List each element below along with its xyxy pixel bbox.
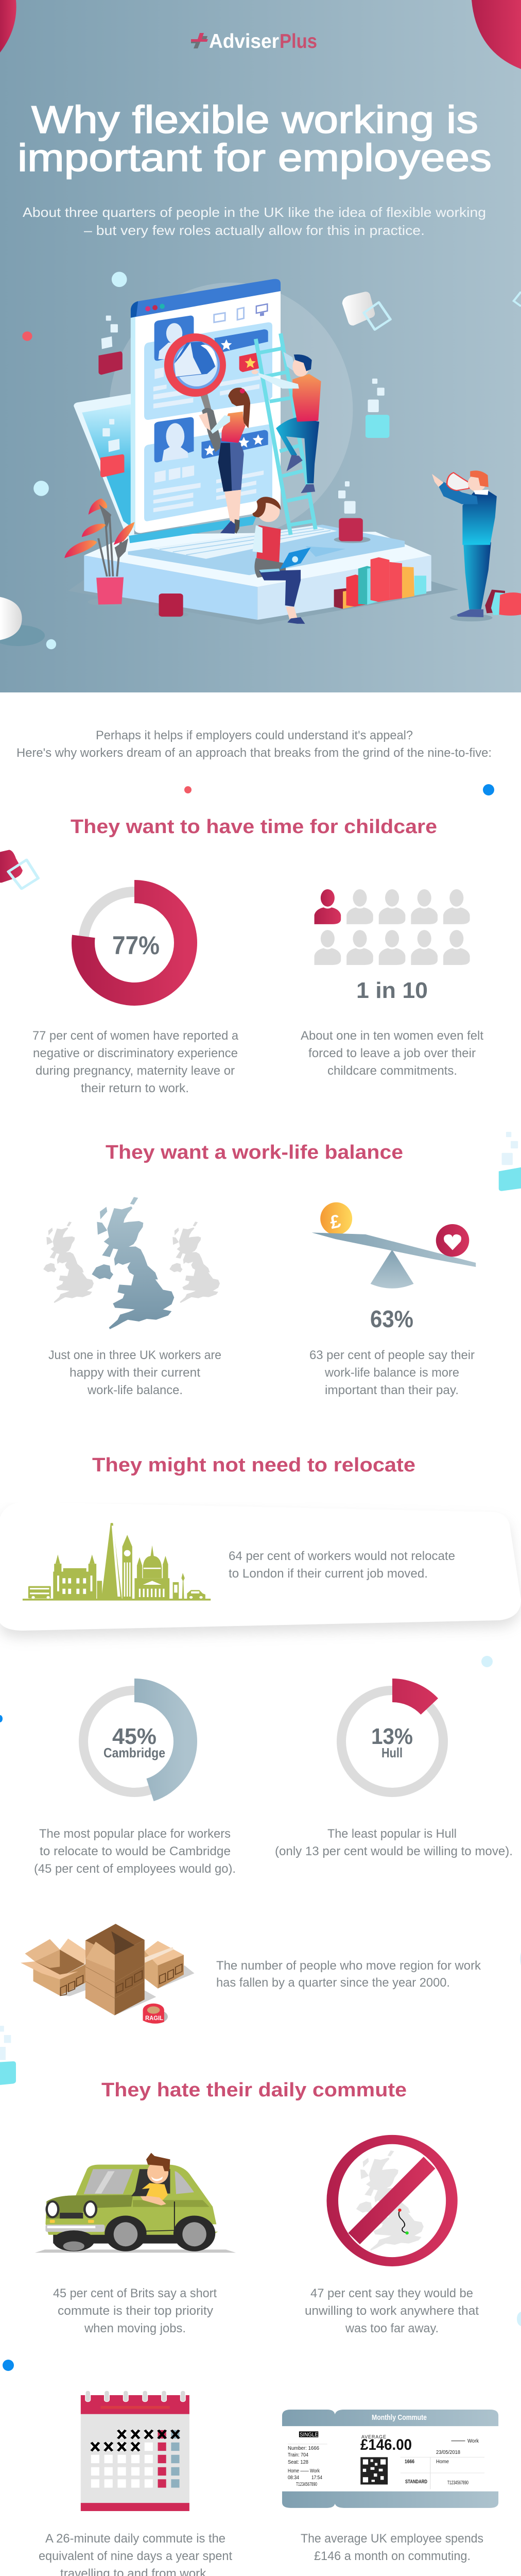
balance scale icon	[311, 1202, 476, 1289]
laptop screen with profile cards	[74, 279, 321, 543]
text: 77 per cent of women	[32, 1029, 239, 1095]
title	[18, 98, 492, 179]
text: one in ten women: About one in ten women even felt	[301, 1029, 483, 1043]
heading: commute: They hate their daily commute	[101, 2079, 407, 2101]
backdrop shapes and laptop platform	[22, 272, 521, 624]
text: 26-minute: A 26-minute daily commute is the	[45, 2532, 225, 2546]
text: least popular Hull	[275, 1827, 513, 1858]
text: one in ten women	[301, 1029, 483, 1078]
magnifying glass	[201, 392, 212, 413]
text: short commute: 45 per cent of Brits say a short	[53, 2286, 217, 2300]
plant	[88, 598, 133, 606]
text: move region	[216, 1959, 481, 1990]
donut chart 13 percent Hull	[341, 1690, 443, 1792]
text: one in three	[48, 1348, 221, 1397]
hero illustration: recruitment scene on a laptop	[0, 272, 521, 649]
title: important for employees	[18, 136, 492, 179]
subtitle: About three quarters of people in the UK like the idea of flexible working	[23, 205, 486, 220]
ticket: monthly commute: Home	[436, 2459, 449, 2465]
star block	[239, 353, 259, 372]
text: 26-minute	[39, 2532, 232, 2576]
pound sign on coin: £	[328, 1210, 342, 1233]
text: one in ten women: forced to leave a job over their	[308, 1046, 476, 1060]
text: most popular Cambridge: The most popular place for workers	[39, 1827, 231, 1841]
card text	[229, 1549, 455, 1581]
intro text: Here's why workers dream of an approach that breaks from the grind of the nine-to-five:	[16, 746, 492, 760]
ticket: monthly commute: Work	[467, 2438, 479, 2444]
donut chart 77 percent: 77%	[112, 931, 160, 960]
corner shape top left	[0, 0, 16, 53]
donut chart 13 percent Hull: Hull	[381, 1745, 403, 1760]
text: move region: The number of people who move region for work	[216, 1959, 481, 1973]
ticket: monthly commute: Number: 1666	[288, 2446, 319, 2451]
text: short commute: when moving jobs.	[84, 2321, 186, 2335]
donut chart 13 percent Hull: 13%	[371, 1724, 413, 1749]
decorative squares right	[499, 1132, 521, 1191]
icon: calendar	[81, 2391, 189, 2511]
text: 63 per cent: work-life balance is more	[324, 1366, 459, 1380]
dot red	[184, 786, 192, 793]
donut chart 45 percent Cambridge	[83, 1690, 185, 1792]
subtitle: – but very few roles actually allow for this in practice.	[84, 223, 425, 238]
donut chart 77 percent	[83, 891, 185, 994]
text: one in three: happy with their current	[70, 1366, 200, 1380]
heading: relocate: They might not need to relocate	[92, 1454, 415, 1476]
subtitle	[23, 205, 486, 238]
text: least popular Hull: The least popular is Hull	[327, 1827, 457, 1841]
text: unwilling: was too far away.	[345, 2321, 439, 2335]
decorative squares left	[0, 850, 38, 889]
text: 77 per cent of women: during pregnancy, maternity leave or	[36, 1064, 235, 1078]
text: unwilling	[305, 2286, 479, 2335]
title: Why flexible working is	[31, 98, 478, 141]
text: most popular Cambridge: to relocate to would be Cambridge	[40, 1844, 231, 1858]
ticket: monthly commute: 08:34	[288, 2475, 299, 2481]
intro text	[16, 728, 492, 760]
stat 63 percent: 63%	[370, 1306, 413, 1332]
ticket: monthly commute: AVERAGE	[361, 2434, 386, 2439]
text: unwilling: unwilling to work anywhere that	[305, 2304, 479, 2318]
dot blue left	[3, 2360, 14, 2371]
foreground people, plant, chart and blocks	[0, 415, 521, 649]
woman seated hero	[257, 501, 280, 522]
text: 77 per cent of women: their return to work.	[81, 1081, 189, 1095]
text: 77 per cent of women: negative or discriminatory experience	[33, 1046, 238, 1060]
intro text: Perhaps it helps if employers could understand it's appeal?	[96, 728, 413, 742]
pictogram 1 in 10	[315, 889, 470, 965]
ticket: monthly commute: SINGLE	[300, 2432, 318, 2438]
ticket: monthly commute: T1234567890	[447, 2480, 468, 2486]
ticket: monthly commute: 1666	[405, 2459, 414, 2465]
text: one in three: work-life balance.	[87, 1383, 183, 1397]
text: least popular Hull: (only 13 per cent would be willing to move).	[275, 1844, 513, 1858]
text: 63 per cent: 63 per cent of people say their	[309, 1348, 475, 1362]
ticket: monthly commute: T1234567890	[296, 2482, 317, 2487]
card text: 64 per cent of workers would not relocate	[229, 1549, 455, 1563]
text: 63 per cent: important than their pay.	[325, 1383, 459, 1397]
man on ladder	[276, 417, 319, 483]
donut chart 45 percent Cambridge: 45%	[112, 1724, 157, 1749]
dot blue	[483, 784, 494, 795]
donut chart 45 percent Cambridge: Cambridge	[103, 1745, 165, 1760]
hero background panel	[0, 0, 521, 692]
dot pale right edge	[517, 2312, 521, 2326]
card text: to London if their current job moved.	[229, 1567, 428, 1581]
text: short commute: commute is their top priority	[58, 2304, 213, 2318]
ticket: monthly commute: STANDARD	[405, 2479, 427, 2485]
ladder	[256, 333, 316, 535]
heading: work-life balance: They want a work-life balance	[106, 1142, 403, 1163]
ticket: monthly commute: Home —— Work	[288, 2468, 320, 2474]
tape label: RAGIL	[145, 2014, 163, 2022]
text: 26-minute: equivalent of nine days a year spent	[39, 2549, 232, 2563]
text: one in ten women: childcare commitments.	[327, 1064, 457, 1078]
header logo	[191, 30, 317, 53]
ticket: monthly commute: 17:54	[311, 2475, 322, 2481]
London skyline	[23, 1523, 211, 1601]
text: unwilling: 47 per cent say they would be	[310, 2286, 473, 2300]
card: London relocation	[0, 1502, 521, 1638]
dot blue left	[0, 1715, 3, 1722]
text: £146	[301, 2532, 483, 2563]
text: 63 per cent	[309, 1348, 475, 1397]
ticket: monthly commute: 23/05/2018	[436, 2450, 460, 2455]
ticket: monthly commute: £146.00	[360, 2436, 412, 2453]
man with megaphone	[450, 614, 492, 621]
heading: childcare: They want to have time for childcare	[71, 816, 437, 838]
text: £146: £146 a month on commuting.	[314, 2549, 471, 2563]
text: 77 per cent of women: 77 per cent of women have reported a	[32, 1029, 239, 1043]
text: most popular Cambridge	[34, 1827, 236, 1876]
dot pale right	[481, 1656, 493, 1667]
woman with magnifier	[228, 387, 250, 428]
bar chart	[334, 588, 353, 609]
stat 1 in 10: 1 in 10	[356, 978, 428, 1003]
text: move region: has fallen by a quarter since the year 2000.	[216, 1976, 450, 1990]
text: short commute	[53, 2286, 217, 2335]
illustration: green car with driver	[35, 2153, 236, 2252]
corner shape top right	[472, 0, 521, 69]
icon: cardboard boxes	[21, 1924, 195, 2024]
icon: UK with no entry sign	[326, 2135, 458, 2266]
ticket: monthly commute: Monthly Commute	[372, 2413, 427, 2422]
text: £146: The average UK employee spends	[301, 2532, 483, 2546]
header logo: Plus	[280, 30, 317, 53]
UK maps: one in three	[43, 1197, 220, 1329]
header logo: Adviser	[209, 30, 279, 53]
text: most popular Cambridge: (45 per cent of employees would go).	[34, 1862, 236, 1876]
ticket: monthly commute	[282, 2410, 498, 2508]
ticket: monthly commute: Train: 704	[288, 2452, 308, 2458]
text: one in three: Just one in three UK workers are	[48, 1348, 221, 1362]
decorative squares left	[0, 1952, 521, 2085]
ticket: monthly commute: Seat: 128	[288, 2460, 308, 2465]
